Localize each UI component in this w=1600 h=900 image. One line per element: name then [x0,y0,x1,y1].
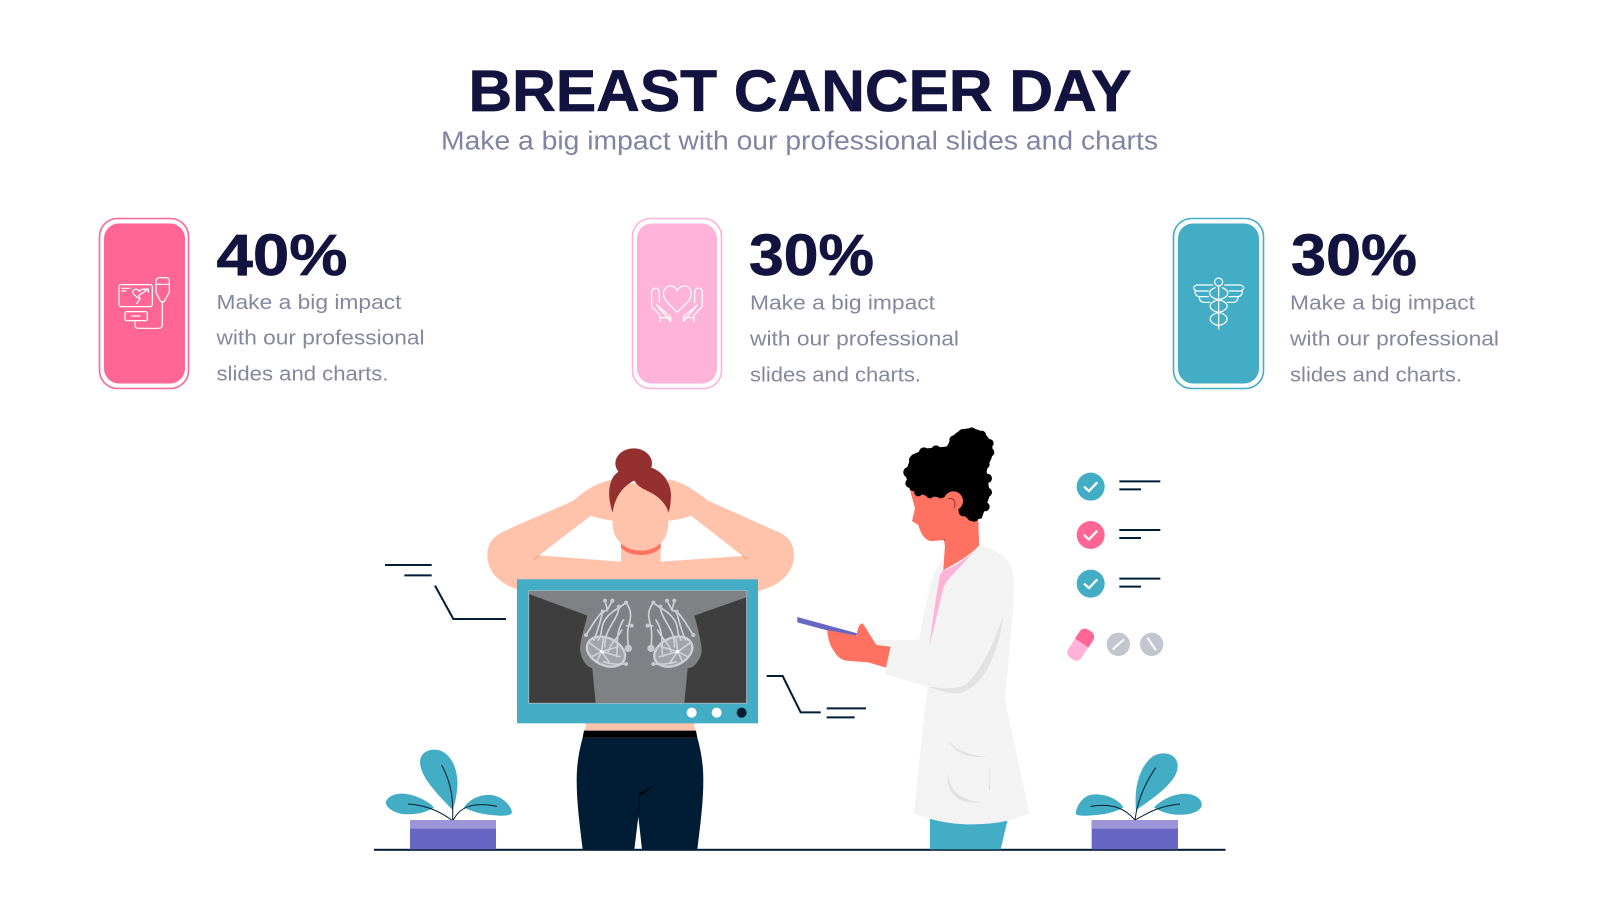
monitor buttons [687,708,747,718]
stat value: 30% [749,223,874,288]
x-ray monitor [517,579,758,723]
check item 2 [1077,521,1160,549]
ground line [374,849,1226,851]
patient lower body [577,720,703,849]
description: slides and charts. [216,362,388,385]
icon: tablet pill 1 [1107,633,1130,656]
panel: stat 30% care [632,218,959,388]
callout: right x-ray label [767,676,866,717]
illustration: patient with x-ray [487,448,794,849]
stat value: 40% [216,223,348,288]
mammogram: left breast network [582,599,634,673]
doctor coat [877,546,1014,715]
doctor upper body [797,427,1014,715]
icon: capsule [1065,626,1096,663]
subtitle: Make a big impact with our professional slides and charts [441,128,1158,156]
icon: caduceus [1194,278,1244,329]
icon: ultrasound monitor [119,278,169,328]
description [215,291,424,385]
checklist [1065,473,1163,663]
plant: right pot [1076,753,1202,849]
stat value: 30% [1291,223,1417,288]
description: with our professional [215,326,424,350]
panel: stat 40% [100,218,424,388]
description: with our professional [1289,328,1499,350]
description: Make a big impact [216,291,402,314]
doctor trousers and coat hem [914,700,1029,849]
plant: left pot [386,750,512,849]
tablet [797,617,857,636]
doctor hair [903,427,994,522]
doctor hand [827,623,891,668]
icon: hands holding heart [652,286,702,322]
description [1289,292,1499,386]
card: pink phone shape [100,218,188,388]
description: slides and charts. [750,364,921,386]
description: Make a big impact [1290,292,1475,314]
card: light pink phone shape [632,218,722,388]
description [749,292,959,386]
check item 1 [1077,473,1160,501]
panel: stat 30% medicine [1174,218,1499,388]
description: slides and charts. [1290,364,1462,386]
doctor ear [944,491,963,511]
check item 3 [1077,570,1160,598]
title: BREAST CANCER DAY [468,59,1132,124]
illustration: doctor [797,427,1029,849]
description: with our professional [749,328,959,350]
card: teal phone shape [1174,218,1264,388]
mammogram: right breast network [646,599,697,673]
icon: tablet pill 2 [1140,633,1163,656]
patient upper body [487,448,794,597]
callout: left x-ray label [385,565,506,619]
description: Make a big impact [750,292,935,314]
